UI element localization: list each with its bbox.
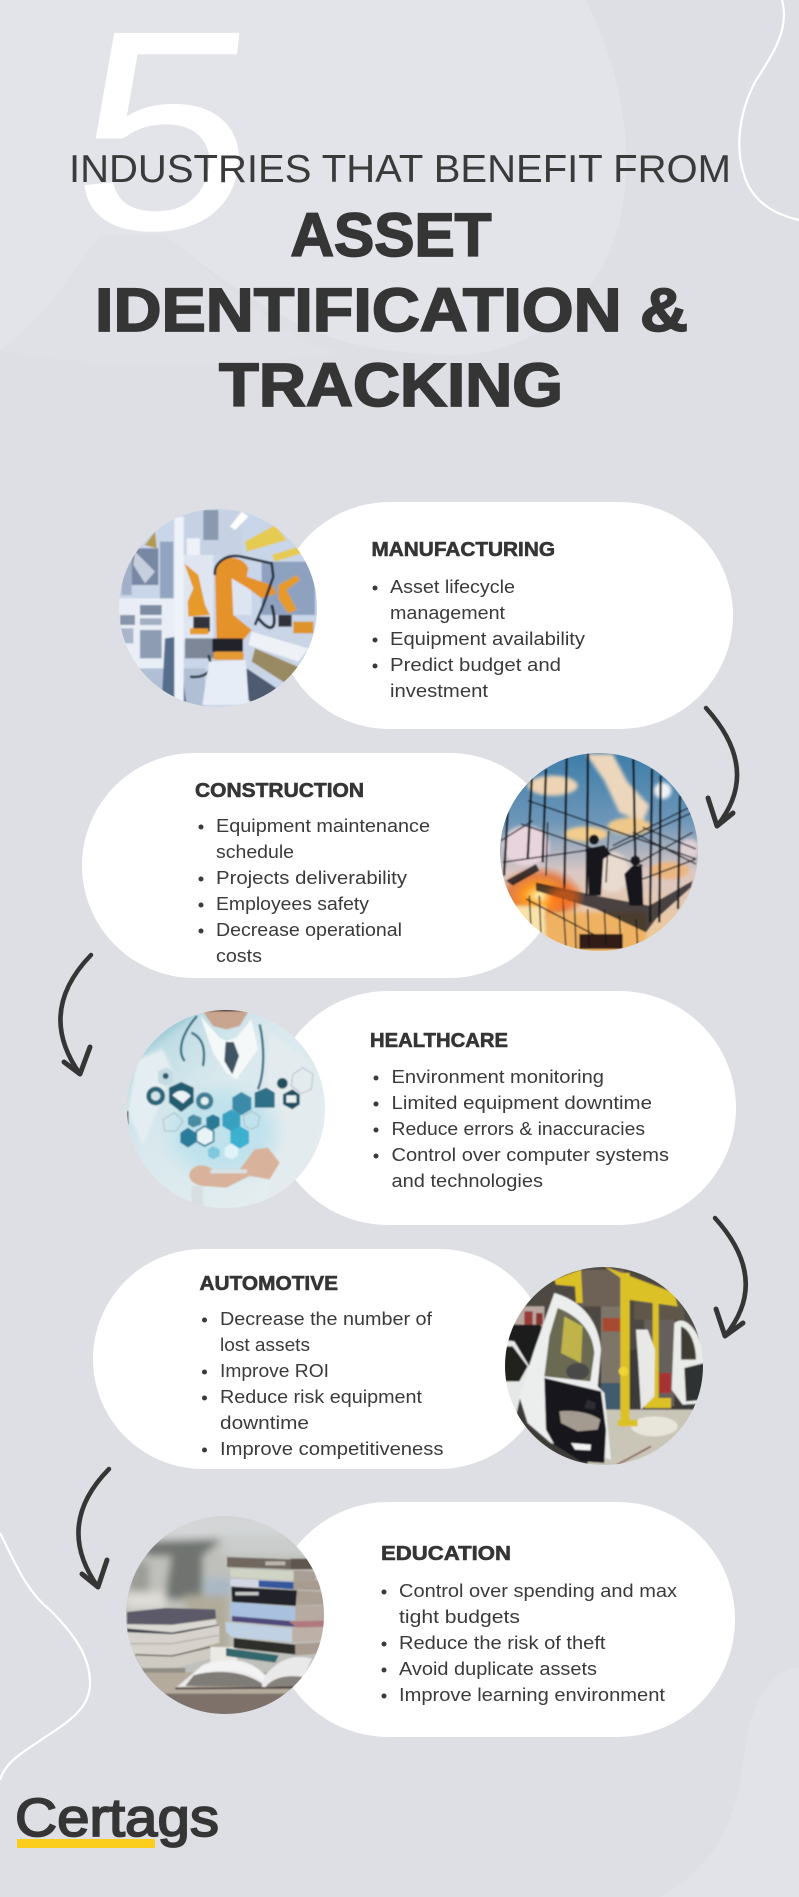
manufacturing bullet list: Predict budget and bbox=[390, 654, 561, 675]
education bullet list: Improve learning environment bbox=[399, 1684, 665, 1705]
construction bullet list: Projects deliverability bbox=[216, 867, 408, 888]
automotive bullet list: Improve ROI bbox=[220, 1360, 329, 1381]
image: robot arms in a factory bbox=[115, 505, 321, 711]
logo: wordmark: Certags bbox=[15, 1788, 219, 1848]
education card bbox=[271, 1502, 735, 1737]
healthcare bullet list: Limited equipment downtime bbox=[392, 1092, 652, 1113]
education heading: EDUCATION bbox=[381, 1543, 511, 1565]
manufacturing bullet list: management bbox=[390, 602, 505, 623]
title: fourth line: TRACKING bbox=[219, 351, 563, 419]
manufacturing heading: MANUFACTURING bbox=[372, 539, 555, 561]
image: workers on scaffolding at sunset bbox=[496, 749, 702, 955]
panel: automotive bbox=[93, 1249, 707, 1469]
construction bullet list: Employees safety bbox=[216, 893, 370, 914]
automotive heading: AUTOMOTIVE bbox=[200, 1273, 338, 1295]
automotive card bbox=[93, 1249, 549, 1469]
healthcare heading: HEALTHCARE bbox=[370, 1030, 508, 1052]
decorative line: bottom left bbox=[0, 1533, 90, 1780]
image: stacks of books bbox=[122, 1512, 328, 1718]
image: car assembly line bbox=[501, 1263, 707, 1469]
decorative blob: bottom right bbox=[660, 1667, 799, 1897]
manufacturing bullet list: investment bbox=[390, 680, 488, 701]
construction bullet list: Equipment maintenance bbox=[216, 815, 430, 836]
panel: manufacturing bbox=[115, 502, 733, 729]
logo: yellow underline bbox=[17, 1839, 155, 1848]
logo: Certags bbox=[15, 1788, 219, 1848]
title: third line: IDENTIFICATION & bbox=[95, 276, 688, 344]
panel: education bbox=[122, 1502, 735, 1737]
education bullet list: Reduce the risk of theft bbox=[399, 1632, 606, 1653]
education bullet list: Avoid duplicate assets bbox=[399, 1658, 597, 1679]
manufacturing bullet list bbox=[372, 576, 586, 701]
healthcare bullet list: Reduce errors & inaccuracies bbox=[392, 1118, 645, 1139]
manufacturing bullet list: Equipment availability bbox=[390, 628, 586, 649]
healthcare bullet list: Control over computer systems bbox=[392, 1144, 669, 1165]
decorative blob: top bbox=[0, 0, 626, 355]
construction bullet list bbox=[198, 815, 430, 966]
decorative line: top right bbox=[739, 0, 799, 220]
automotive bullet list: lost assets bbox=[220, 1334, 310, 1355]
arrow: healthcare to automotive bbox=[715, 1218, 746, 1336]
automotive bullet list: Improve competitiveness bbox=[220, 1438, 444, 1459]
image: doctor with holographic medical icons bbox=[123, 1006, 329, 1212]
education bullet list: tight budgets bbox=[399, 1606, 520, 1627]
education bullet list: Control over spending and max bbox=[399, 1580, 678, 1601]
automotive bullet list: Decrease the number of bbox=[220, 1308, 433, 1329]
title bbox=[69, 148, 731, 419]
healthcare bullet list: Environment monitoring bbox=[392, 1066, 604, 1087]
title: first line: INDUSTRIES THAT BENEFIT FROM bbox=[69, 148, 731, 191]
healthcare bullet list bbox=[374, 1066, 669, 1191]
healthcare bullet list: and technologies bbox=[392, 1170, 543, 1191]
panel: construction bbox=[82, 749, 702, 978]
automotive bullet list bbox=[202, 1308, 444, 1459]
arrow: automotive to education bbox=[78, 1469, 109, 1587]
manufacturing card bbox=[276, 502, 733, 729]
panel: healthcare bbox=[123, 991, 736, 1225]
construction card bbox=[82, 753, 562, 978]
construction bullet list: schedule bbox=[216, 841, 294, 862]
automotive bullet list: Reduce risk equipment bbox=[220, 1386, 422, 1407]
manufacturing bullet list: Asset lifecycle bbox=[390, 576, 515, 597]
education bullet list bbox=[382, 1580, 678, 1705]
title: second line: ASSET bbox=[290, 201, 492, 269]
arrow: construction to healthcare bbox=[60, 955, 91, 1074]
construction bullet list: costs bbox=[216, 945, 262, 966]
construction heading: CONSTRUCTION bbox=[195, 780, 364, 802]
healthcare card bbox=[271, 991, 736, 1225]
decorative blob: middle peak bbox=[0, 235, 340, 365]
arrow: manufacturing to construction bbox=[706, 708, 737, 826]
construction bullet list: Decrease operational bbox=[216, 919, 402, 940]
automotive bullet list: downtime bbox=[220, 1412, 309, 1433]
